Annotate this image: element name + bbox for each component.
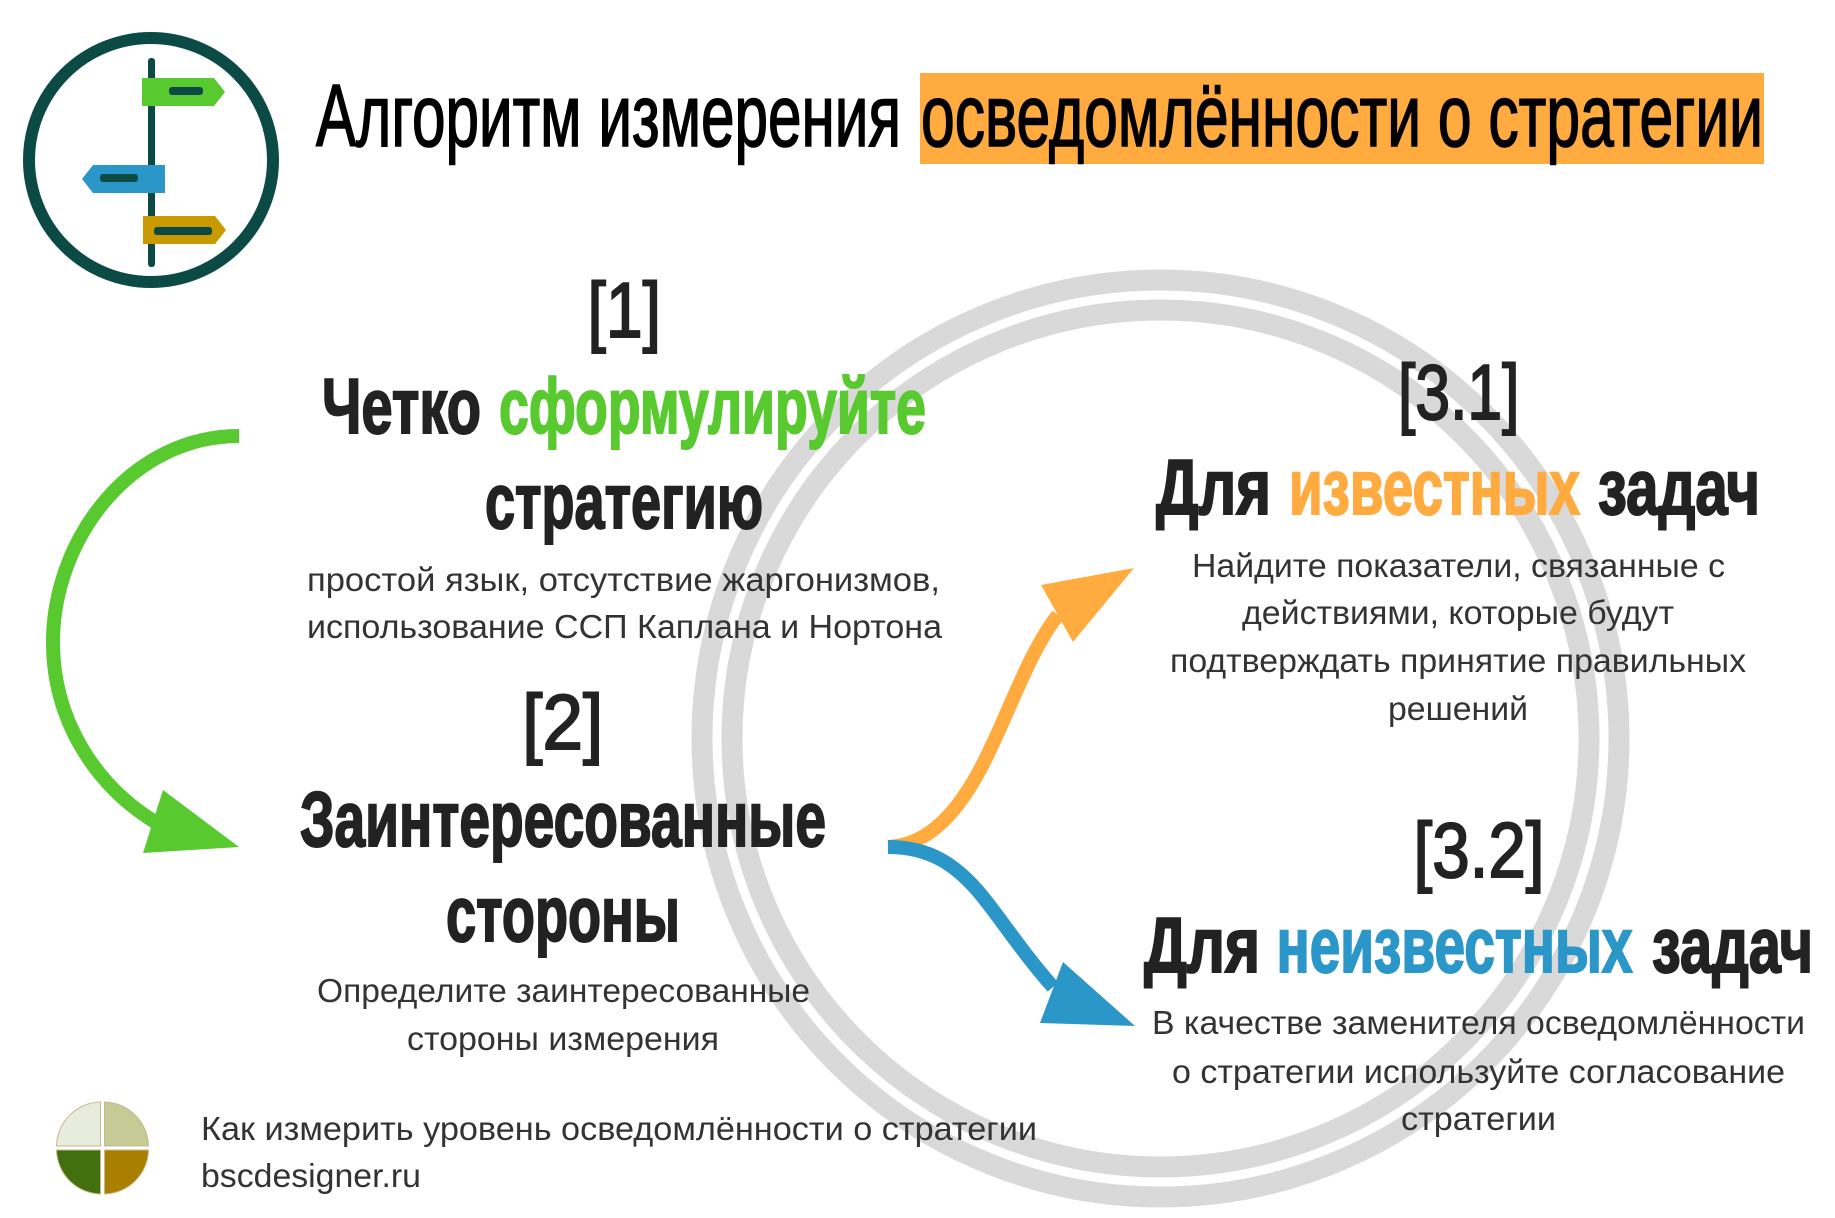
heading: step 3.2: неизвестных: [1276, 901, 1632, 989]
text: step 3.1 description: действиями, которые будут: [1242, 594, 1674, 631]
panel: step 1: [307, 266, 943, 645]
number 1: [1]: [588, 266, 661, 354]
heading: step 3.1: известных: [1289, 443, 1580, 531]
heading: step 2: [300, 775, 826, 958]
text: step 3.2 description: [1152, 1004, 1805, 1137]
panel: step 3.2: [1144, 806, 1813, 1137]
icon: signpost in circle: [29, 38, 273, 282]
heading: step 3.1: Для: [1156, 443, 1271, 531]
number 2: [2]: [522, 678, 603, 766]
title: Алгоритм измерения: [316, 66, 901, 165]
number 3.2: [3.2]: [1414, 806, 1544, 894]
text: step 1 description: использование ССП Каплана и Нортона: [307, 608, 943, 645]
icon: BSC Designer logo: [56, 1102, 148, 1194]
text: step 3.1 description: подтверждать принятие правильных: [1170, 642, 1747, 679]
text: step 1 description: простой язык, отсутствие жаргонизмов,: [307, 561, 940, 598]
text: step 1 description: [307, 561, 943, 645]
heading: step 1: [322, 362, 926, 545]
text: step 3.1 description: Найдите показатели, связанные с: [1192, 547, 1725, 584]
source text: [201, 1110, 1037, 1194]
source text: Как измерить уровень осведомлённости о стратегии: [201, 1110, 1037, 1147]
arrow: blue, to step 3.2: [888, 847, 1135, 1026]
heading: step 3.1: [1156, 443, 1760, 531]
title: [316, 66, 1764, 165]
heading: step 1: стратегию: [485, 457, 763, 545]
background rings: [702, 280, 1619, 1197]
panel: step 3.1: [1156, 348, 1760, 727]
text: step 2 description: Определите заинтересованные: [317, 972, 810, 1009]
text: step 3.2 description: стратегии: [1401, 1100, 1556, 1137]
arrow: orange, to step 3.1: [888, 568, 1134, 847]
source text: bscdesigner.ru: [201, 1157, 421, 1194]
text: step 3.1 description: решений: [1388, 690, 1528, 727]
text: step 3.2 description: В качестве заменителя осведомлённости: [1152, 1004, 1805, 1041]
heading: step 1: Четко: [322, 362, 481, 450]
number 3.1: [3.1]: [1398, 348, 1520, 436]
panel: step 2: [300, 678, 826, 1057]
arrow: green, step 1 to step 2: [53, 436, 239, 853]
heading: step 1: сформулируйте: [499, 362, 926, 450]
heading: step 2: стороны: [446, 870, 680, 958]
text: step 3.2 description: о стратегии используйте согласование: [1172, 1053, 1785, 1090]
heading: step 3.2: Для: [1144, 901, 1260, 989]
heading: step 2: Заинтересованные: [300, 775, 826, 863]
heading: step 3.1: задач: [1598, 443, 1760, 531]
text: step 2 description: стороны измерения: [407, 1020, 719, 1057]
text: step 2 description: [317, 972, 810, 1057]
text: step 3.1 description: [1170, 547, 1747, 727]
